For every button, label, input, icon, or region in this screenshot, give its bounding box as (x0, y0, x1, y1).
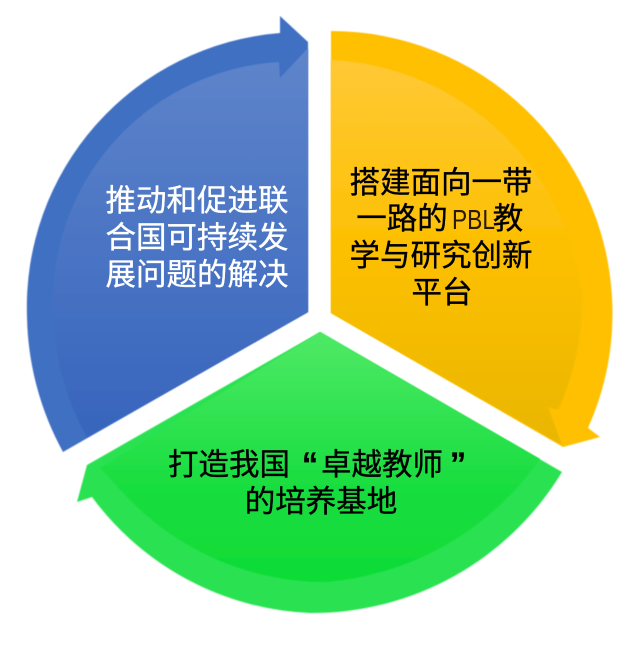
green text line one (168, 446, 466, 482)
green text line one: 打造我国 (168, 448, 290, 482)
yellow text line with PBL: 一路的 (356, 202, 448, 236)
green text line one: 卓越教师 (321, 448, 443, 482)
panel: green segment (77, 332, 562, 613)
blue segment text: 推动和促进联 (106, 184, 288, 218)
panel: blue segment (27, 16, 308, 452)
yellow segment text: 学与研究创新 (350, 239, 532, 273)
yellow text line with PBL (356, 202, 523, 236)
green segment text: 的培养基地 (245, 485, 397, 519)
blue arrow shape (27, 16, 308, 452)
yellow inner highlight (331, 60, 582, 445)
green segment text (168, 446, 466, 519)
yellow text line with PBL: PBL (452, 204, 495, 235)
green text line one: ” (450, 446, 466, 482)
blue segment text: 合国可持续发 (106, 221, 288, 255)
yellow segment text: 平台 (412, 276, 472, 310)
blue segment text (106, 184, 288, 292)
panel: yellow segment (331, 31, 612, 447)
yellow text line with PBL: 教 (493, 202, 523, 236)
green arrow shape (77, 332, 562, 613)
blue inner highlight (53, 48, 308, 437)
yellow segment text: 搭建面向一带 (350, 166, 532, 200)
yellow segment text (350, 166, 532, 310)
green text line one: “ (302, 446, 318, 482)
green inner highlight (100, 332, 540, 582)
yellow arrow shape (331, 31, 612, 447)
blue segment text: 展问题的解决 (106, 258, 288, 292)
